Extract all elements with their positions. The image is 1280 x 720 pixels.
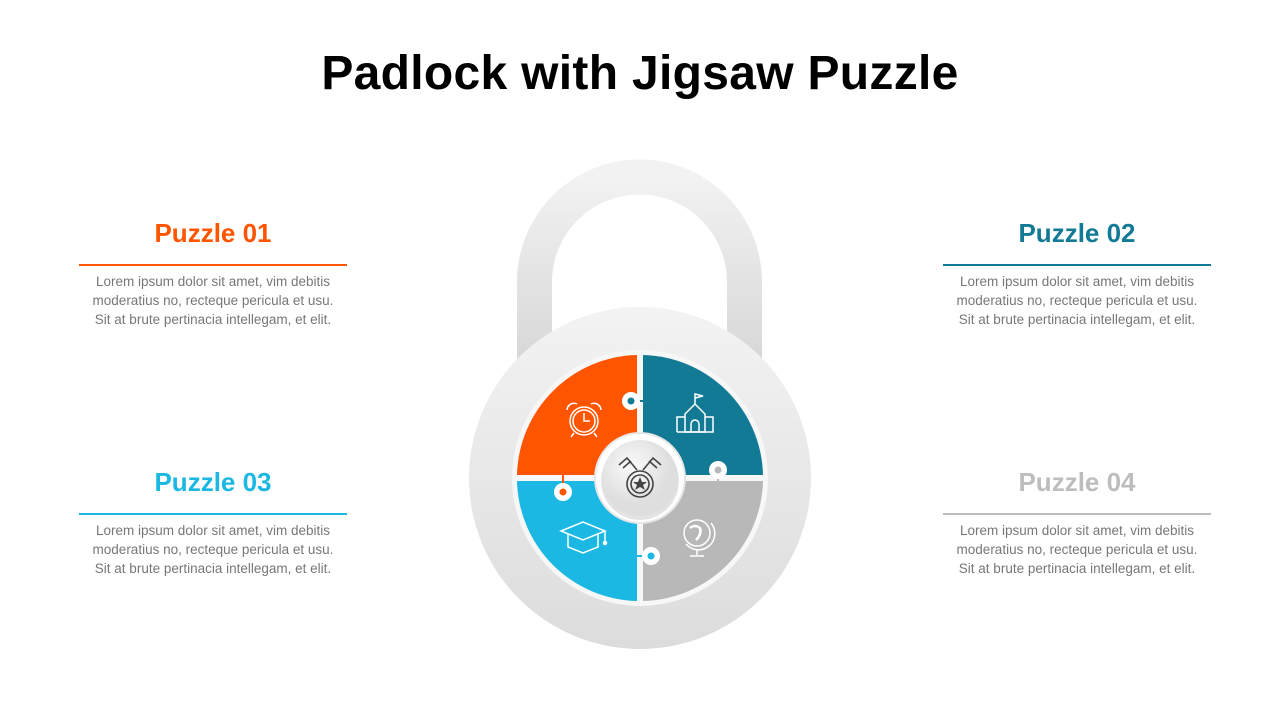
text block: puzzle 04 bbox=[943, 467, 1211, 576]
text block: puzzle 02: moderatius no, recteque pericula et usu. bbox=[957, 293, 1197, 308]
text block: puzzle 03: moderatius no, recteque pericula et usu. bbox=[93, 542, 333, 557]
text block: puzzle 03: Sit at brute pertinacia intellegam, et elit. bbox=[95, 561, 331, 576]
shackle bbox=[534, 177, 744, 370]
text block: puzzle 01 bbox=[79, 218, 347, 327]
center medal bbox=[595, 433, 685, 523]
text block: puzzle 04: Puzzle 04 bbox=[1018, 467, 1136, 497]
icon: graduation cap bbox=[561, 522, 606, 553]
text block: puzzle 04: Lorem ipsum dolor sit amet, vim debitis bbox=[960, 523, 1194, 538]
text block: puzzle 01: moderatius no, recteque pericula et usu. bbox=[93, 293, 333, 308]
lock body bbox=[469, 307, 811, 649]
text block: puzzle 04: Sit at brute pertinacia intellegam, et elit. bbox=[959, 561, 1195, 576]
text block: puzzle 02: Lorem ipsum dolor sit amet, vim debitis bbox=[960, 274, 1194, 289]
icon: school bbox=[677, 394, 713, 432]
text block: puzzle 02 bbox=[943, 218, 1211, 327]
text block: puzzle 01: Lorem ipsum dolor sit amet, vim debitis bbox=[96, 274, 330, 289]
puzzle pieces bbox=[517, 355, 763, 601]
text block: puzzle 03: Lorem ipsum dolor sit amet, vim debitis bbox=[96, 523, 330, 538]
text block: puzzle 02: Sit at brute pertinacia intellegam, et elit. bbox=[959, 312, 1195, 327]
connectors bbox=[631, 400, 643, 402]
icon: alarm clock bbox=[567, 403, 601, 437]
text block: puzzle 02: Puzzle 02 bbox=[1018, 218, 1136, 248]
text block: puzzle 03 bbox=[79, 467, 347, 576]
text block: puzzle 01: Puzzle 01 bbox=[154, 218, 272, 248]
text block: puzzle 04: moderatius no, recteque pericula et usu. bbox=[957, 542, 1197, 557]
title: Padlock with Jigsaw Puzzle bbox=[321, 47, 959, 100]
icon: globe bbox=[684, 520, 715, 556]
text block: puzzle 03: Puzzle 03 bbox=[154, 467, 272, 497]
text block: puzzle 01: Sit at brute pertinacia intellegam, et elit. bbox=[95, 312, 331, 327]
